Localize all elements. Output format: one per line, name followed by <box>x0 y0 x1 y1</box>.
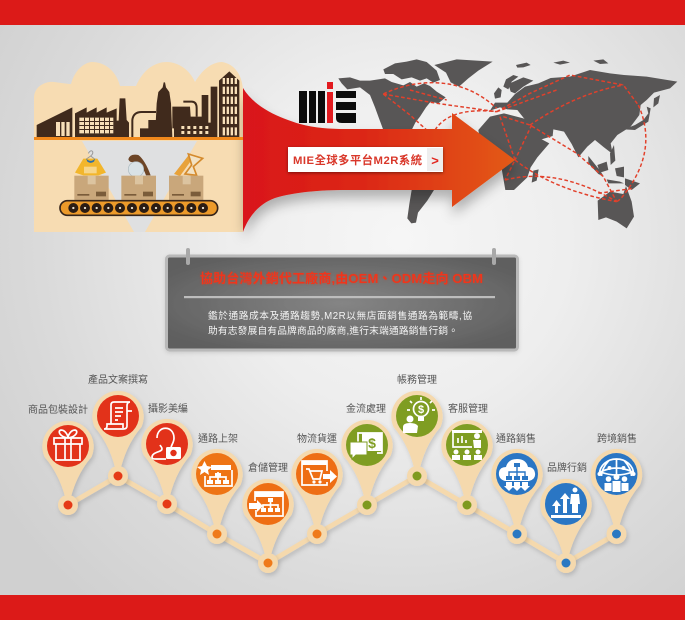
label: package design: 商品包裝設計 <box>28 403 88 416</box>
world map <box>338 59 677 228</box>
red arrow <box>243 88 515 232</box>
plant <box>172 87 217 137</box>
pin: brand marketing <box>540 479 592 573</box>
dashed trade routes <box>383 75 646 202</box>
label: channel listing: 通路上架 <box>198 432 238 445</box>
factory skyline <box>37 71 239 137</box>
icon: presentation <box>452 430 482 460</box>
orange shelf line <box>34 137 243 140</box>
label: brand marketing: 品牌行銷 <box>547 461 587 474</box>
pin: accounting <box>391 391 443 486</box>
label: MIE global platform: > <box>431 153 439 168</box>
products on conveyor <box>60 151 218 215</box>
board hooks <box>186 248 496 265</box>
icon: scroll <box>104 402 132 429</box>
top red band <box>0 0 685 25</box>
domed tower <box>155 82 172 137</box>
board body text <box>208 309 472 337</box>
icon: growth bars <box>551 488 581 518</box>
label: MIE global platform: MIE全球多平台M2R系統 <box>293 153 422 167</box>
label: accounting: 帳務管理 <box>397 373 437 386</box>
label: logistics: 物流貨運 <box>297 432 337 445</box>
label: photography: 攝影美編 <box>148 402 188 415</box>
pin: warehouse <box>242 479 294 573</box>
icon: cloud network <box>499 459 535 491</box>
bottom red band <box>0 595 685 620</box>
pin: channel sales <box>491 449 543 544</box>
pin: customer service <box>441 420 493 515</box>
building: warehouse <box>37 107 72 137</box>
tall building <box>219 71 239 137</box>
beige factory panel <box>34 62 243 232</box>
cardboard boxes <box>74 176 203 200</box>
timeline path <box>68 476 616 563</box>
MIE logo <box>299 82 356 123</box>
pin: cash flow <box>341 420 393 515</box>
pin: logistics <box>291 449 343 544</box>
board body text: 助有志發展自有品牌商品的廠商,進行末端通路銷售行銷。 <box>208 324 458 337</box>
label: copywriting: 產品文案撰寫 <box>88 373 148 386</box>
label: cash flow: 金流處理 <box>346 402 386 415</box>
gap in panel <box>82 141 197 232</box>
label: customer service: 客服管理 <box>448 402 488 415</box>
board body text: 鑑於通路成本及通路趨勢,M2R以無店面銷售通路為範疇,協 <box>208 309 472 322</box>
label: channel sales: 通路銷售 <box>496 432 536 445</box>
pin: photography <box>141 419 193 514</box>
label: cross-border sales: 跨境銷售 <box>597 432 637 445</box>
icon: money chat: $ <box>368 435 376 451</box>
board heading: 協助台灣外銷代工廠商,由OEM、ODM走向 OBM <box>200 271 483 286</box>
pin: copywriting <box>92 391 144 486</box>
product: glass vase <box>128 155 151 177</box>
info board <box>166 248 518 350</box>
pin: channel listing <box>191 449 243 544</box>
product: yellow shirt <box>75 151 106 175</box>
label: warehouse: 倉儲管理 <box>248 461 288 474</box>
conveyor belt <box>60 201 218 215</box>
pin: package design <box>42 421 94 515</box>
pipes <box>132 102 197 137</box>
pin: cross-border sales <box>591 449 642 544</box>
icon: idea bulb: $ <box>418 404 424 416</box>
icon: person with camera <box>152 428 181 459</box>
icon: gift <box>54 430 82 460</box>
product: hourglass <box>174 153 203 176</box>
icon: globe with people <box>598 459 636 492</box>
icon: warehouse flow <box>249 492 283 516</box>
building: sawtooth factory <box>75 98 129 137</box>
label: MIE global platform <box>288 147 443 172</box>
icon: browser with star <box>197 461 232 486</box>
icon: cart <box>302 461 337 485</box>
